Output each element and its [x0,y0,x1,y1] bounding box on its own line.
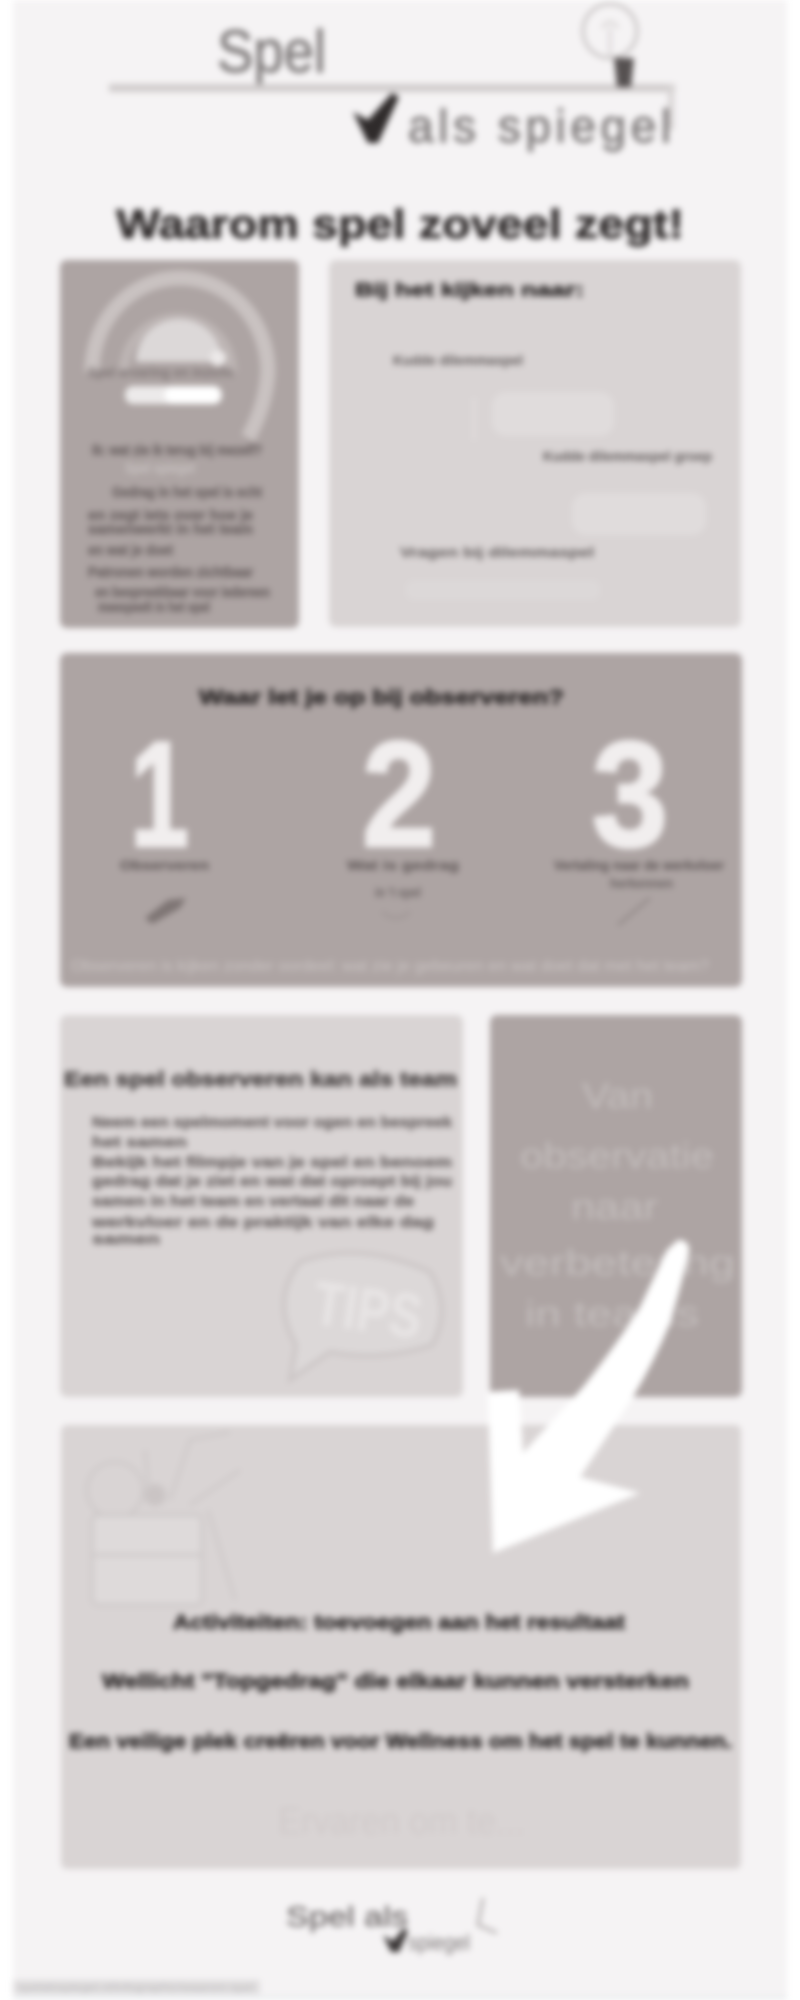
panel: resultaat [61,1425,741,1869]
panel: observeren oproep [490,1015,742,1397]
panel heading: Een spel observeren kan als team [64,1069,457,1091]
connector [473,398,475,440]
bullet list: gedrag dat je ziet en wat dat oproept bij jou [92,1173,452,1190]
step 1: 1 [130,710,189,878]
script line: Ervaren om te... [278,1801,525,1843]
label 3: Vragen bij dilemmaspel [400,544,594,560]
step 3 [554,710,725,925]
footer logo [286,1898,497,1955]
icon: light bulb with tack [583,4,637,87]
result line 1: Activiteiten: toevoegen aan het resultaat [173,1612,625,1634]
step 2: Wat is gedrag [347,857,459,873]
step 2: 2 [362,710,436,878]
panel heading: Waar let je op bij observeren? [199,687,564,709]
icon: speech bubble tips: TIPS [310,1269,426,1352]
panel text [88,443,270,616]
title: Spel als spiegel: als spiegel [408,100,671,152]
heading: Waarom spel zoveel zegt: Waarom spel zoveel zegt! [116,201,684,247]
chart: gauge arcs [92,278,268,438]
icon: speech bubble tips [284,1253,442,1380]
panel text: Ik: wat zie ik terug bij mezelf? [92,443,262,459]
icon: check mark [353,93,399,143]
step 3: herkennen [610,875,673,891]
title: Spel als spiegel [109,18,675,152]
step 2 [347,710,459,918]
bullet list [91,1114,453,1248]
panel: bij het kijken naar [329,260,741,627]
panel text: in teams [525,1293,699,1334]
step 3: 3 [592,710,668,878]
panel: een spel observeren als team [60,1015,463,1397]
panel text: Patronen worden zichtbaar [88,565,253,581]
title: Spel als spiegel: Spel [217,18,326,85]
panel text: en wat je doet [88,543,173,559]
panel text: Spel spiegel [125,461,195,477]
status bar at the bottom: spelalsspiegel.nl/infographic/waarom-spel [18,1982,254,1994]
panel text: en bespreekbaar voor iedereen [95,585,270,601]
panel text [500,1075,735,1334]
bullet list: het samen [92,1134,187,1151]
footer logo: spiegel [408,1930,470,1955]
bullet list: samen in het team en vertaal dit naar de [92,1193,414,1210]
panel heading: Bij het kijken naar: [355,280,584,300]
label 1: Kudde dilemmaspel [393,352,523,368]
text block 1 [492,392,614,436]
bullet list: werkvloer en de praktijk van elke dag [91,1214,434,1231]
panel text: meespeelt in het spel [98,600,210,616]
panel: waar let je op [60,653,742,987]
panel text: naar [571,1186,658,1227]
result line 3: Een veilige plek creëren voor Wellness om het spel te kunnen. [69,1731,732,1753]
result line 2: Wellicht "Topgedrag" die elkaar kunnen versterken [102,1671,689,1693]
gauge label: Spel ervaring en inzicht [88,364,233,380]
panel text: samenwerkt in het team [88,522,253,538]
footer logo: Spel als [286,1901,408,1932]
panel text: en zegt iets over hoe je [88,508,253,524]
step 3: Vertaling naar de werkvloer [554,857,725,873]
panel text: observatie [520,1135,714,1176]
icon: doodle of gift and flowers [87,1432,240,1605]
panel: gauge and explanation [60,260,299,628]
bullet list: Neem een spelmoment voor ogen en bespreek [92,1114,453,1131]
panel footnote: Observeren is kijken zonder oordeel: wat zie je gebeuren en wat doet dat met het team? [71,958,709,975]
text block 3 [406,580,600,600]
panel text: Van [582,1075,653,1116]
bullet list: Bekijk het filmpje van je spel en benoem [92,1154,452,1171]
step 1: Observeren [120,857,209,873]
status bar at the bottom [13,1980,787,2000]
panel text: verbetering [500,1242,735,1283]
text block 2 [572,493,706,535]
label 2: Kudde dilemmaspel groep [543,448,712,464]
bullet list: samen [92,1231,160,1248]
step 1 [120,710,209,924]
step 2: in 't spel [375,884,421,900]
arrow: large white arrow [488,1240,689,1553]
panel text: Gedrag in het spel is echt [112,485,262,501]
